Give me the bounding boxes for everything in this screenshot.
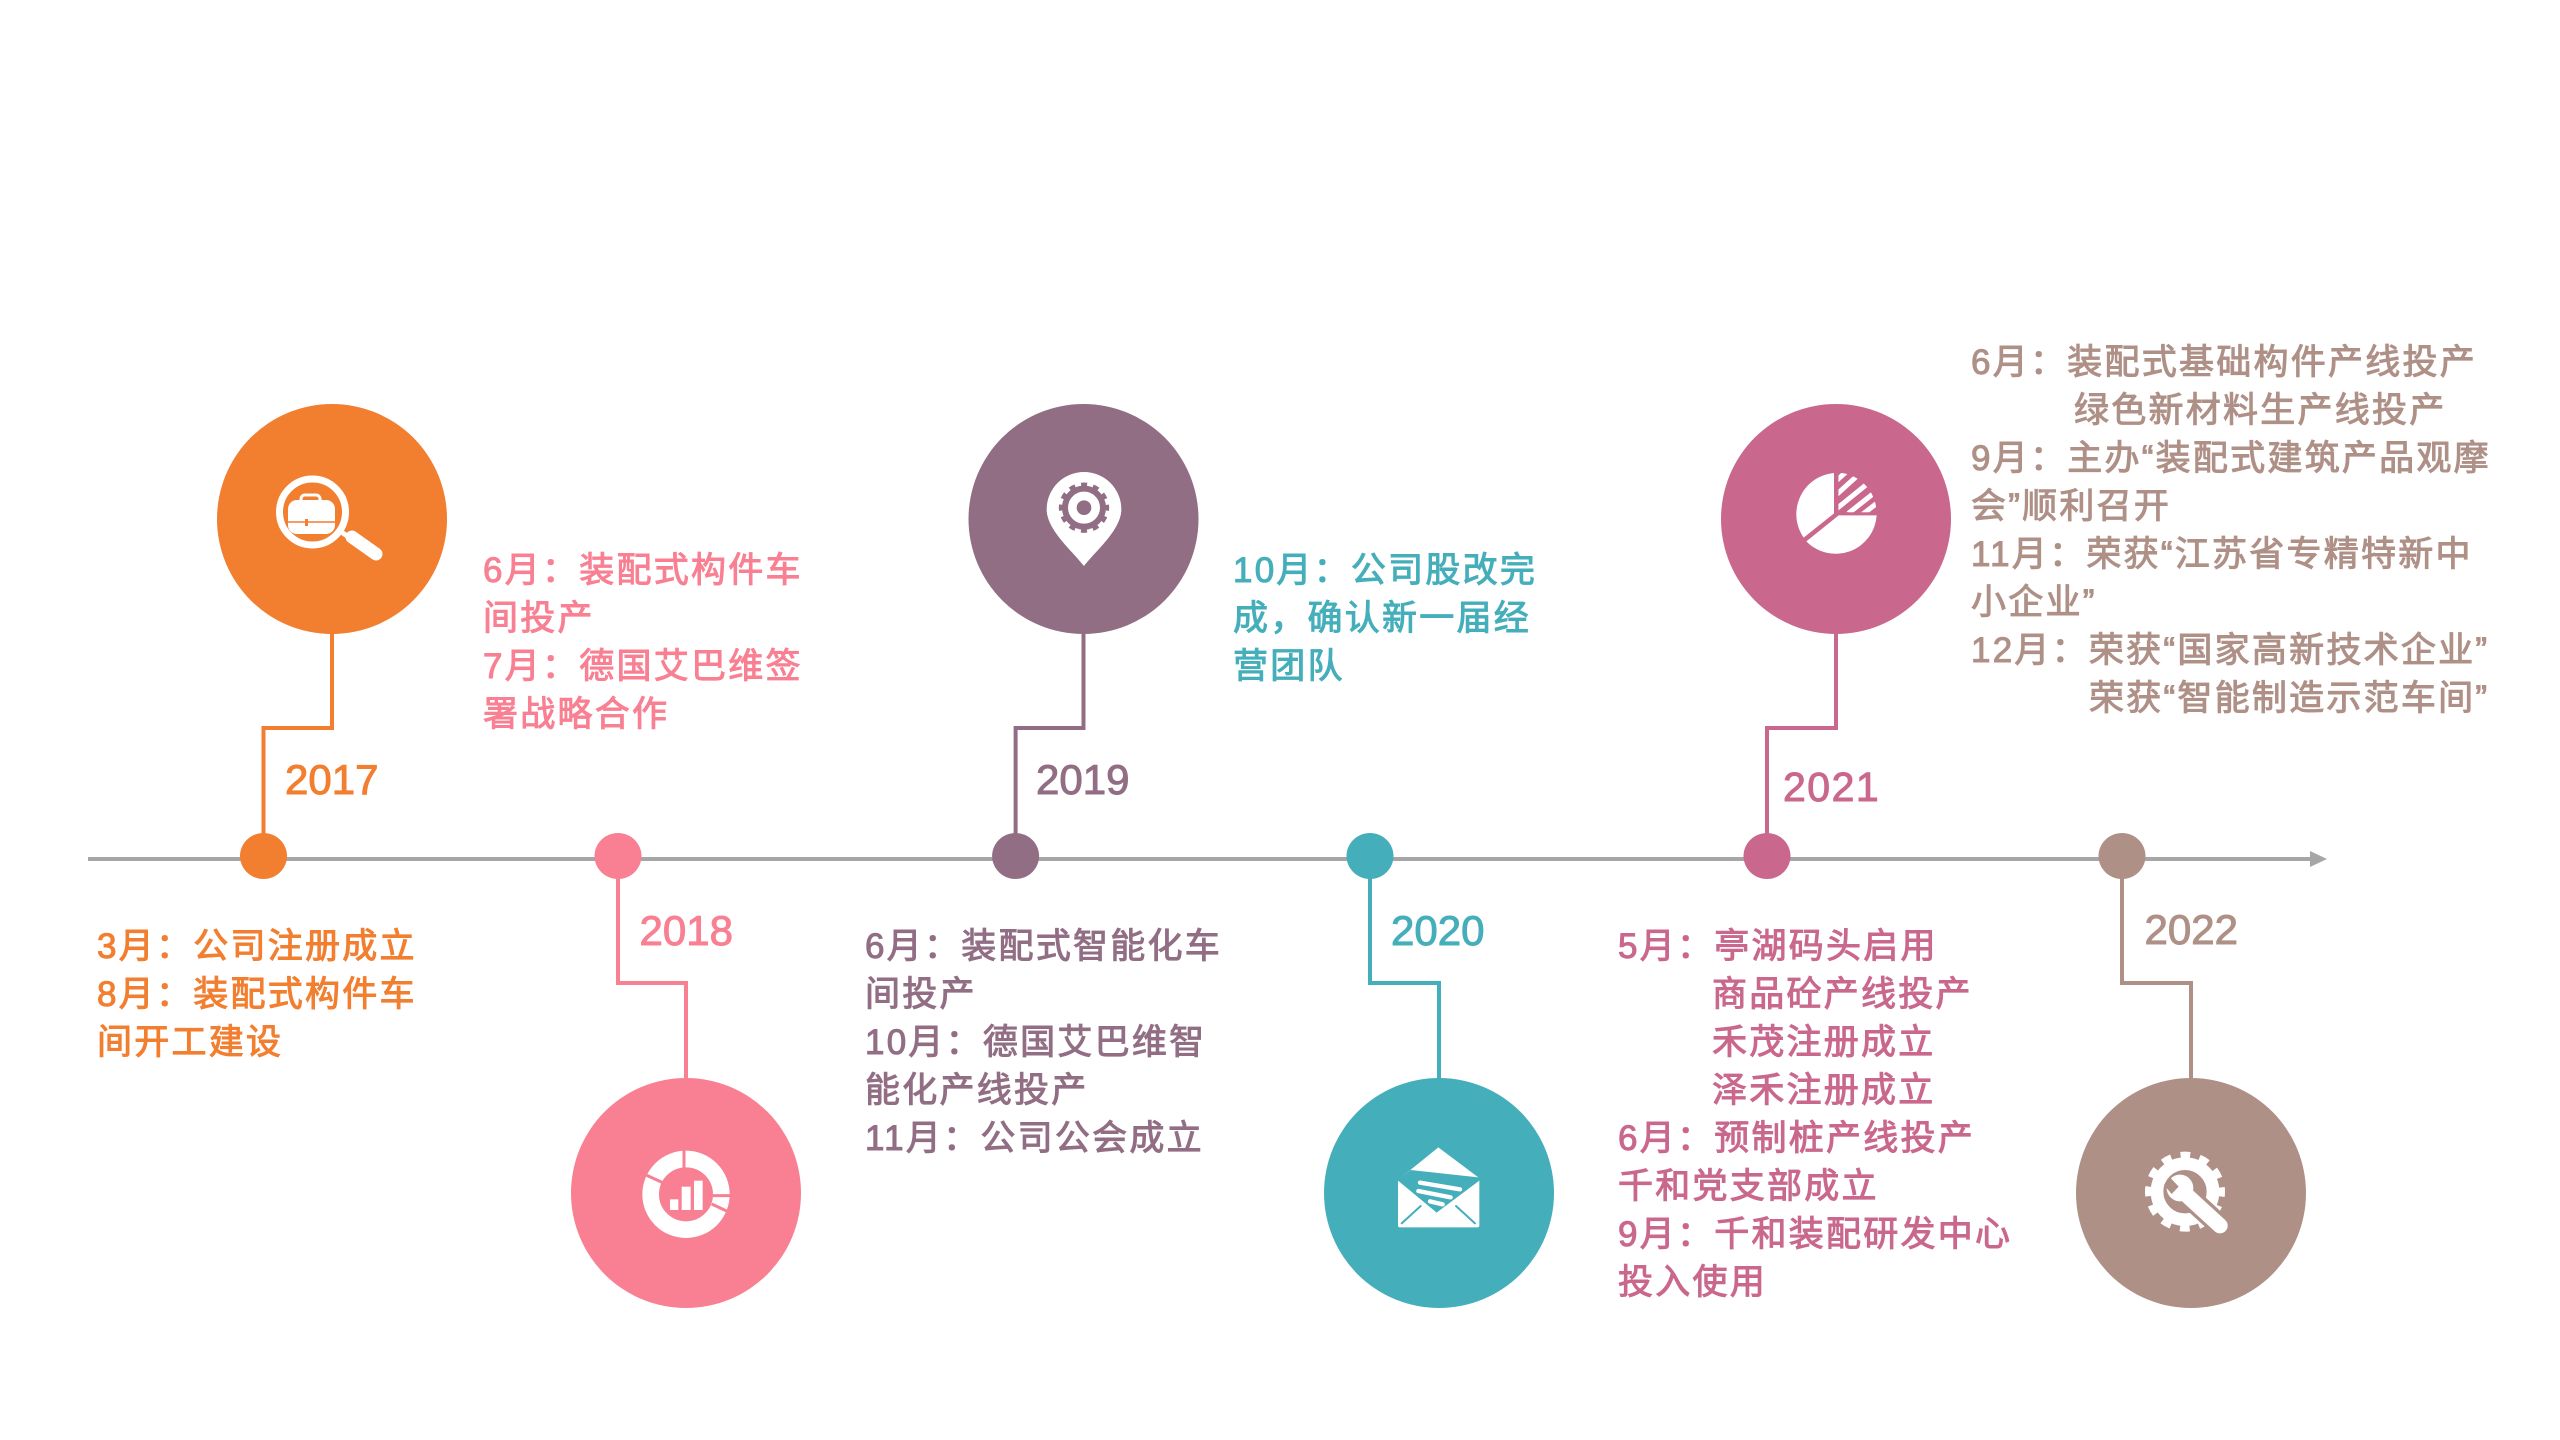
text block 2018: 6月：装配式构件车 bbox=[483, 551, 803, 590]
text block 2021 lower: 6月：预制桩产线投产 bbox=[1618, 1119, 1975, 1158]
circle badge 2017 bbox=[217, 404, 447, 634]
text block 2021 lower: 千和党支部成立 bbox=[1618, 1167, 1879, 1206]
year 2018: 2018 bbox=[640, 907, 733, 954]
dot 2017 bbox=[240, 833, 287, 879]
connector 2020 bbox=[1370, 870, 1439, 1082]
timeline infographic bbox=[88, 344, 2488, 1308]
text block 2021 lower: 5月：亭湖码头启用 bbox=[1618, 927, 1938, 966]
dot 2021 bbox=[1744, 833, 1790, 879]
icon: magnifier over briefcase bbox=[280, 479, 376, 554]
dot 2020 bbox=[1346, 833, 1394, 879]
text block 2017: 8月：装配式构件车 bbox=[97, 975, 417, 1014]
text block 2019 lower: 6月：装配式智能化车 bbox=[865, 927, 1222, 966]
dot 2022 bbox=[2098, 833, 2146, 879]
connector 2019 bbox=[1016, 630, 1084, 840]
year 2020: 2020 bbox=[1391, 907, 1484, 954]
milestone 2022 bbox=[1971, 343, 2491, 1308]
text block 2022: 绿色新材料生产线投产 bbox=[2074, 391, 2447, 430]
dot 2018 bbox=[594, 833, 642, 879]
icon: open envelope with letter bbox=[1398, 1147, 1479, 1227]
text block 2019 lower: 11月：公司公会成立 bbox=[865, 1119, 1204, 1158]
connector 2022 bbox=[2122, 870, 2191, 1082]
text block 2019 lower: 间投产 bbox=[865, 975, 977, 1014]
text block 2022: 9月：主办“装配式建筑产品观摩 bbox=[1971, 439, 2491, 478]
circle badge 2018 bbox=[571, 1078, 801, 1308]
text block 2022: 小企业” bbox=[1971, 583, 2097, 622]
text block 2020: 成，确认新一届经 bbox=[1233, 599, 1531, 638]
milestone 2018 bbox=[483, 551, 803, 1308]
milestone 2020 bbox=[1233, 551, 1554, 1308]
connector 2018 bbox=[618, 870, 686, 1082]
text block 2018: 署战略合作 bbox=[483, 695, 669, 734]
icon: gear with wrench bbox=[2149, 1156, 2221, 1228]
connector 2021 bbox=[1767, 630, 1836, 840]
text block 2021 lower: 泽禾注册成立 bbox=[1712, 1071, 1936, 1110]
icon: location pin with gear bbox=[1047, 472, 1121, 566]
icon: pie chart with hatched slice bbox=[1796, 473, 1877, 554]
circle badge 2022 bbox=[2076, 1078, 2306, 1308]
text block 2021 lower: 商品砼产线投产 bbox=[1712, 975, 1973, 1014]
text block 2021 lower: 投入使用 bbox=[1618, 1263, 1767, 1302]
year 2017: 2017 bbox=[285, 756, 378, 803]
dot 2019 bbox=[992, 833, 1039, 879]
text block 2019 lower: 能化产线投产 bbox=[865, 1071, 1089, 1110]
year 2019: 2019 bbox=[1036, 756, 1129, 803]
text block 2018: 间投产 bbox=[483, 599, 595, 638]
milestone 2019 bbox=[865, 404, 1222, 1158]
text block 2022: 12月：荣获“国家高新技术企业” bbox=[1971, 631, 2489, 670]
text block 2017: 3月：公司注册成立 bbox=[97, 927, 417, 966]
text block 2017: 间开工建设 bbox=[97, 1023, 283, 1062]
text block 2022: 会”顺利召开 bbox=[1971, 487, 2171, 526]
text block 2022: 11月：荣获“江苏省专精特新中 bbox=[1971, 535, 2473, 574]
text block 2021 lower: 9月：千和装配研发中心 bbox=[1618, 1215, 2012, 1254]
text block 2019 lower: 10月：德国艾巴维智 bbox=[865, 1023, 1206, 1062]
year 2022: 2022 bbox=[2144, 906, 2238, 953]
text block 2022: 6月：装配式基础构件产线投产 bbox=[1971, 343, 2477, 382]
circle badge 2020 bbox=[1324, 1078, 1554, 1308]
text block 2020: 营团队 bbox=[1233, 647, 1345, 686]
timeline axis with arrow bbox=[88, 851, 2327, 867]
milestone 2021 bbox=[1618, 404, 2012, 1302]
connector 2017 bbox=[264, 630, 332, 840]
text block 2022: 荣获“智能制造示范车间” bbox=[2089, 679, 2489, 718]
icon: donut chart with bars bbox=[646, 1150, 731, 1230]
text block 2020: 10月：公司股改完 bbox=[1233, 551, 1537, 590]
circle badge 2019 bbox=[968, 404, 1198, 634]
text block 2018: 7月：德国艾巴维签 bbox=[483, 647, 803, 686]
text block 2021 lower: 禾茂注册成立 bbox=[1712, 1023, 1936, 1062]
year 2021: 2021 bbox=[1783, 764, 1880, 810]
circle badge 2021 bbox=[1721, 404, 1951, 634]
milestone 2017 bbox=[97, 404, 447, 1062]
